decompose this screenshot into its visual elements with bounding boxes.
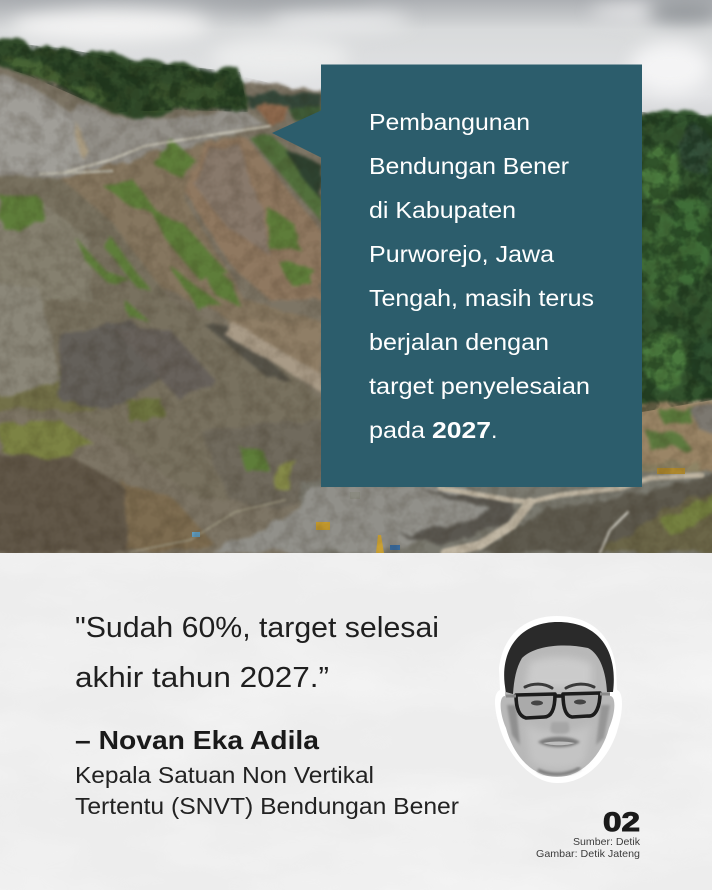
callout pointer	[272, 110, 322, 158]
callout text: .	[491, 417, 497, 443]
slope road	[40, 126, 285, 552]
lower background panel	[0, 553, 712, 890]
sticker outline	[495, 616, 622, 783]
callout text: Bendungan Bener	[369, 153, 569, 179]
distant trees and red soil	[245, 92, 322, 110]
source credits: Gambar: Detik Jateng	[536, 848, 640, 860]
quote text: "Sudah 60%, target selesai	[75, 612, 439, 644]
callout text	[369, 109, 594, 443]
vegetation patches	[0, 140, 312, 470]
glasses	[516, 693, 600, 718]
nose	[550, 722, 570, 734]
hillside base	[0, 38, 330, 560]
treeline upper left	[0, 38, 248, 120]
quote text: akhir tahun 2027.”	[75, 662, 329, 694]
left grey slope	[57, 180, 154, 282]
callout box	[321, 64, 642, 487]
eyebrows	[525, 684, 594, 688]
portrait: Novan Eka Adila	[495, 616, 622, 783]
callout text: berjalan dengan	[369, 329, 549, 355]
speaker role: Tertentu (SNVT) Bendungan Bener	[75, 793, 459, 819]
photo: Bener dam construction site	[0, 0, 712, 560]
right dirt terraces	[642, 398, 712, 475]
callout text: Tengah, masih terus	[369, 285, 594, 311]
speaker role	[75, 762, 459, 819]
callout text: pada	[369, 417, 425, 443]
callout text: di Kabupaten	[369, 197, 516, 223]
dirt access road	[440, 475, 702, 553]
beard	[538, 768, 580, 774]
speaker name: – Novan Eka Adila	[75, 725, 320, 755]
page number: 02	[603, 807, 640, 837]
lower dark slope	[0, 453, 129, 553]
green slope beside landslide	[248, 136, 322, 222]
callout text: target penyelesaian	[369, 373, 590, 399]
quote text	[75, 612, 439, 694]
moustache and mouth	[538, 737, 580, 747]
callout panel	[272, 64, 642, 487]
cut rock slope	[0, 72, 266, 178]
speaker role: Kepala Satuan Non Vertikal	[75, 762, 374, 788]
source credits: Sumber: Detik	[573, 836, 641, 848]
callout text: Purworejo, Jawa	[369, 241, 554, 267]
construction pit and roads	[210, 470, 712, 560]
excavators and trucks	[192, 468, 685, 553]
eyes	[531, 700, 586, 706]
callout text: Pembangunan	[369, 109, 530, 135]
landslide brown soil	[185, 136, 322, 300]
callout text: 2027	[432, 417, 491, 443]
sky with clouds	[0, 0, 712, 117]
face	[501, 630, 614, 777]
photo grain	[0, 0, 712, 553]
hair	[504, 622, 614, 694]
source credits	[536, 836, 641, 860]
right forest	[636, 110, 712, 412]
glasses temples	[506, 694, 610, 696]
foliage texture	[0, 42, 712, 412]
